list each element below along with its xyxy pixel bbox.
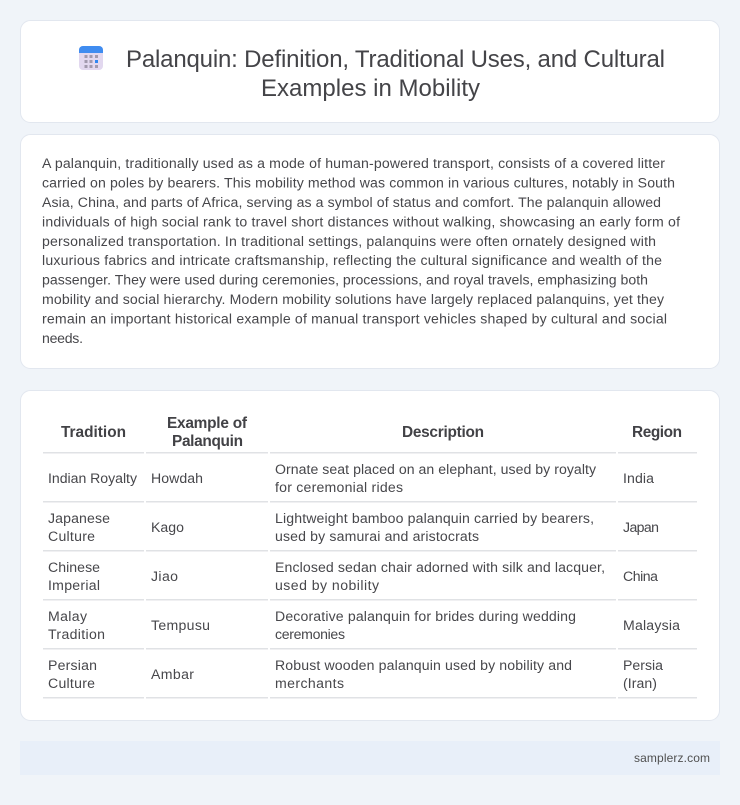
text block: palanquin description: individuals of high social rank to travel short distances without walking, showcasing an early form of	[42, 213, 680, 229]
table header	[61, 415, 682, 450]
text block: palanquin description: remain an important historical example of manual transport vehicles shaped by cultural and social	[42, 310, 667, 326]
table row: Japanese Culture: Kago	[151, 519, 184, 535]
table row: Malay Tradition: Tradition	[48, 626, 105, 642]
table row: Malay Tradition: Tempusu	[151, 617, 210, 633]
table row: Persian Culture: (Iran)	[623, 675, 657, 691]
table header: Description	[402, 424, 484, 441]
table row: Malay Tradition: Decorative palanquin for brides during wedding	[275, 608, 576, 624]
text block: palanquin description: needs.	[42, 330, 83, 346]
title: Palanquin: Definition, Traditional Uses, and Cultural	[126, 46, 665, 73]
table row: Japanese Culture	[48, 510, 659, 544]
table row: Indian Royalty: Howdah	[151, 470, 203, 486]
table row: Chinese Imperial: Chinese	[48, 559, 100, 575]
table row: Persian Culture: merchants	[275, 675, 344, 691]
footer: samplerz.com	[634, 751, 710, 765]
table row: Malay Tradition: Malay	[48, 608, 88, 624]
table row: Chinese Imperial: China	[623, 568, 658, 584]
text block: palanquin description	[42, 155, 680, 346]
table row: Malay Tradition: ceremonies	[275, 626, 345, 642]
text block: palanquin description: luxurious fabrics and intricate craftsmanship, reflecting the cultural significance and wealth of the	[42, 252, 662, 268]
table row: Indian Royalty: for ceremonial rides	[275, 479, 403, 495]
table row: Indian Royalty: Indian Royalty	[48, 470, 138, 486]
text block: palanquin description: mobility and social hierarchy. Modern mobility solutions have largely replaced palanquins, yet they	[42, 291, 665, 307]
table row: Malay Tradition	[48, 608, 680, 642]
table row: Chinese Imperial: used by nobility	[275, 577, 380, 593]
footer	[20, 741, 720, 775]
table row: Persian Culture: Ambar	[151, 666, 194, 682]
table header: Region	[632, 424, 682, 441]
panel: table	[20, 390, 720, 720]
text block: palanquin description: Asia, China, and parts of Africa, serving as a symbol of status and comfort. The palanquin allowed	[42, 194, 661, 210]
text block: palanquin description: A palanquin, traditionally used as a mode of human-powered transport, consists of a covered litter	[42, 155, 665, 171]
table row: Japanese Culture: used by samurai and aristocrats	[275, 528, 479, 544]
table row: Chinese Imperial: Imperial	[48, 577, 100, 593]
table row: Indian Royalty: India	[623, 470, 654, 486]
table row: Persian Culture: Persia	[623, 657, 663, 673]
table row: Persian Culture: Robust wooden palanquin used by nobility and	[275, 657, 572, 673]
table row: Chinese Imperial	[48, 559, 658, 593]
title	[126, 46, 665, 102]
table header: Example of	[167, 415, 248, 432]
text block: palanquin description: carried on poles by bearers. This mobility method was common in various cultures, notably in South	[42, 174, 675, 190]
table row: Persian Culture: Culture	[48, 675, 95, 691]
panel: title header	[20, 20, 720, 122]
title: Examples in Mobility	[261, 75, 480, 102]
text block: palanquin description: passenger. They were used during ceremonies, processions, and royal travels, emphasizing both	[42, 272, 648, 288]
table row: Chinese Imperial: Enclosed sedan chair adorned with silk and lacquer,	[275, 559, 605, 575]
table row: Japanese Culture: Japanese	[48, 510, 110, 526]
table row: Indian Royalty	[48, 461, 654, 495]
table header: Palanquin	[172, 433, 243, 450]
text block: palanquin description: personalized transportation. In traditional settings, palanquins were often ornately designed with	[42, 233, 656, 249]
table row: Indian Royalty: Ornate seat placed on an elephant, used by royalty	[275, 461, 597, 477]
table row: Japanese Culture: Lightweight bamboo palanquin carried by bearers,	[275, 510, 594, 526]
table row: Persian Culture	[48, 657, 663, 691]
table row: Chinese Imperial: Jiao	[151, 568, 178, 584]
table row: Japanese Culture: Japan	[623, 519, 659, 535]
table row: Persian Culture: Persian	[48, 657, 97, 673]
table header: Tradition	[61, 424, 126, 441]
icon: calendar	[79, 46, 103, 70]
table row: Malay Tradition: Malaysia	[623, 617, 680, 633]
panel: description	[20, 134, 720, 368]
table row: Japanese Culture: Culture	[48, 528, 95, 544]
